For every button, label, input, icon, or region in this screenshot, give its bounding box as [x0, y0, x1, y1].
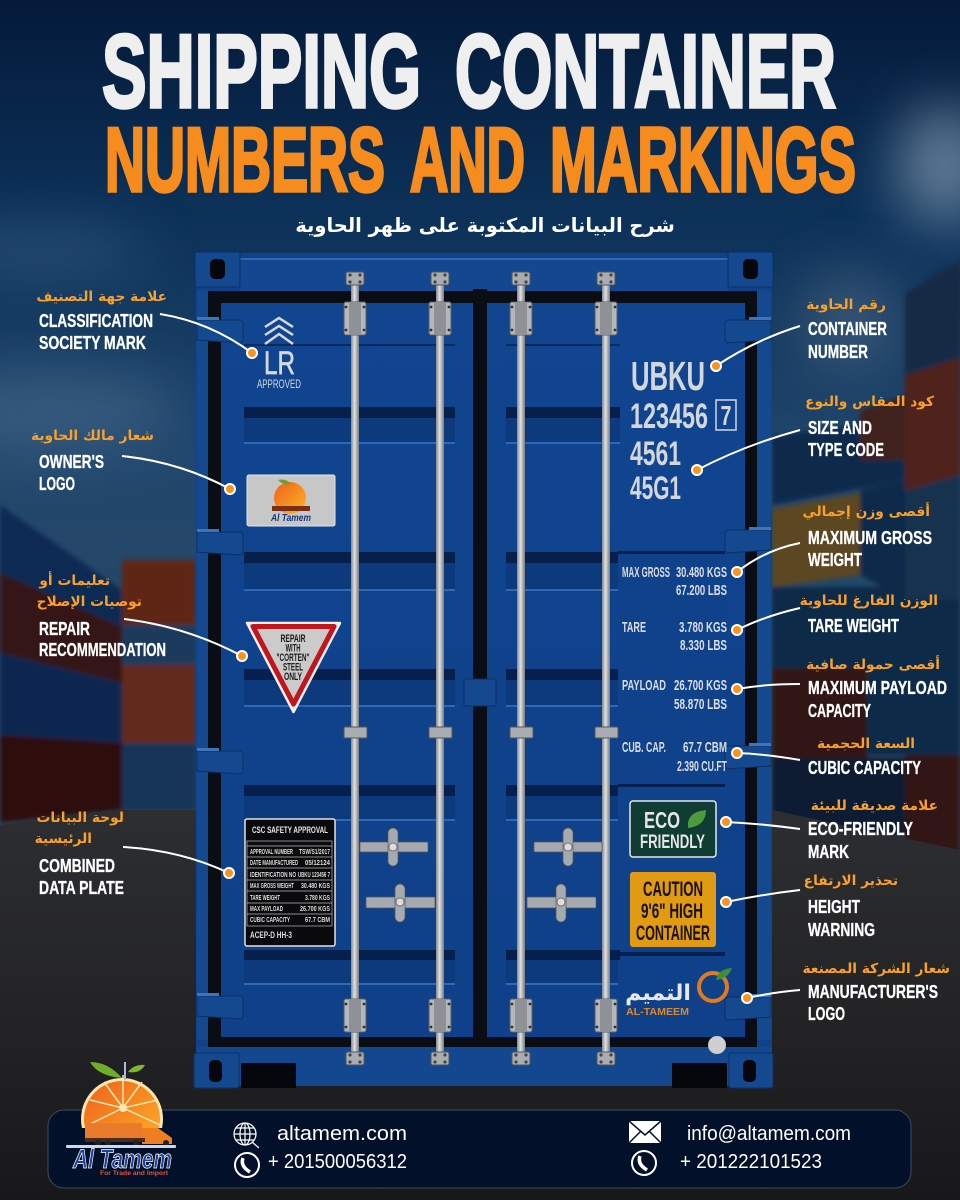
callout: repair recommendation: RECOMMENDATION — [39, 640, 166, 660]
Al Tamem company logo — [66, 1062, 176, 1177]
CSC safety approval data plate: 26.700 KGS — [300, 906, 330, 913]
top rail — [240, 258, 728, 291]
weight and capacity markings: 2.390 CU.FT — [677, 758, 727, 775]
callout: combined data plate: COMBINED — [39, 856, 115, 876]
callout: repair recommendation: توصيات الإصلاح — [37, 594, 142, 610]
callout: classification society mark: علامة جهة التصنيف — [36, 289, 167, 305]
callout: cubic capacity — [732, 736, 921, 778]
weight and capacity markings: TARE — [622, 619, 646, 636]
repair recommendation triangle: WITH — [286, 642, 301, 654]
side posts — [197, 290, 771, 1040]
callout: cubic capacity: السعة الحجمية — [817, 736, 915, 752]
callout: height warning: تحذير الارتفاع — [804, 873, 898, 889]
weight and capacity markings: 58.870 LBS — [674, 696, 727, 713]
title: SHIPPING — [102, 14, 421, 130]
phone number: + 201500056312 — [268, 1151, 407, 1173]
weight and capacity markings: 26.700 KGS — [674, 677, 727, 694]
footer contact bar — [48, 1110, 911, 1188]
weight and capacity markings — [622, 564, 727, 775]
callout: eco-friendly mark — [721, 798, 938, 862]
door gasket frame — [208, 289, 757, 1047]
callout: combined data plate: لوحة البيانات — [36, 810, 124, 826]
callout: container number: CONTAINER — [808, 319, 887, 339]
CSC safety approval data plate: TSW/S1/2017 — [299, 849, 330, 856]
right door — [487, 303, 745, 1037]
callout: tare weight — [732, 593, 938, 636]
callout: size and type code — [692, 394, 935, 475]
classification mark — [257, 318, 301, 391]
CSC safety approval data plate: 05/12124 — [305, 860, 330, 867]
grey circle marker — [708, 1036, 726, 1054]
hinges — [197, 317, 771, 1020]
CSC safety approval data plate: UBKU 123456 7 — [298, 872, 330, 879]
container number markings: 123456 — [630, 397, 708, 436]
weight and capacity markings: 3.780 KGS — [679, 619, 727, 636]
callout: cubic capacity: CUBIC CAPACITY — [808, 758, 921, 778]
callout: eco-friendly mark: ECO-FRIENDLY — [808, 819, 913, 839]
CSC safety approval data plate: DATE MANUFACTURED — [250, 860, 298, 867]
callout: repair recommendation: تعليمات أو — [38, 571, 110, 589]
manufacturer's logo: التميم — [625, 981, 691, 1006]
icon: envelope — [629, 1121, 661, 1143]
CSC safety approval data plate: ACEP-D HH-3 — [250, 930, 292, 940]
classification mark: APPROVED — [257, 377, 301, 391]
height caution sign — [630, 872, 716, 947]
weight and capacity markings: 8.330 LBS — [680, 637, 727, 654]
CSC safety approval data plate: MAX GROSS WEIGHT — [250, 883, 294, 890]
callout: owner's logo: OWNER'S — [39, 452, 104, 472]
callout: combined data plate: DATA PLATE — [39, 878, 124, 898]
CSC safety approval data plate: 67.7 CBM — [305, 917, 330, 924]
shipping container — [194, 252, 773, 1088]
owner's logo plate — [247, 475, 335, 526]
eco friendly sign: FRIENDLY — [640, 832, 705, 853]
container number markings: 45G1 — [630, 470, 681, 506]
lock rods — [344, 272, 618, 1065]
website: altamem.com — [277, 1123, 407, 1145]
icon: globe — [234, 1123, 259, 1148]
Al Tamem company logo: Al Tamem — [72, 1144, 172, 1174]
CSC safety approval data plate: 30.480 KGS — [301, 883, 330, 890]
classification mark: LR — [264, 345, 295, 381]
icon: phone — [235, 1153, 259, 1177]
manufacturer's logo — [625, 968, 732, 1018]
callout: manufacturer's logo: شعار الشركة المصنعة — [802, 961, 950, 977]
CSC safety approval data plate: MAX PAYLOAD — [250, 906, 283, 913]
callout: owner's logo: LOGO — [39, 474, 75, 494]
weight and capacity markings: MAX GROSS — [622, 564, 670, 581]
weight and capacity markings: 67.7 CBM — [683, 739, 727, 756]
height caution sign: CAUTION — [643, 878, 703, 901]
CSC safety approval data plate: APPROVAL NUMBER — [250, 849, 293, 856]
weight and capacity markings: PAYLOAD — [622, 677, 666, 694]
callout: height warning: HEIGHT — [808, 897, 860, 917]
container body — [196, 253, 772, 1086]
callout: maximum gross weight: WEIGHT — [808, 550, 862, 570]
container number markings: 4561 — [630, 435, 681, 473]
callout: size and type code: كود المقاس والنوع — [805, 394, 935, 410]
corner castings — [194, 252, 773, 1088]
title: AND — [410, 110, 525, 211]
height caution sign: CONTAINER — [636, 922, 710, 945]
callout: combined data plate — [35, 810, 234, 898]
repair recommendation triangle: ONLY — [284, 671, 302, 683]
callout: manufacturer's logo: LOGO — [808, 1004, 845, 1024]
CSC safety approval data plate: 3.780 KGS — [305, 895, 330, 902]
callout: eco-friendly mark: MARK — [808, 842, 849, 862]
callout: size and type code: TYPE CODE — [808, 440, 884, 460]
door handles — [360, 828, 602, 922]
height caution sign: 9'6" HIGH — [641, 900, 703, 923]
CSC safety approval data plate: IDENTIFICATION NO — [250, 872, 296, 879]
callout: tare weight: الوزن الفارغ للحاوية — [800, 593, 938, 609]
callout: tare weight: TARE WEIGHT — [808, 616, 899, 636]
owner's logo plate: Al Tamem — [270, 513, 311, 524]
CSC safety approval data plate: CUBIC CAPACITY — [250, 917, 290, 924]
callout: container number: NUMBER — [808, 342, 868, 362]
title: NUMBERS — [105, 110, 385, 211]
callout: height warning: WARNING — [808, 920, 875, 940]
callout: owner's logo: شعار مالك الحاوية — [31, 428, 154, 444]
callout: container number: رقم الحاوية — [806, 297, 886, 313]
container number markings — [630, 353, 736, 506]
callout: repair recommendation — [37, 571, 247, 661]
repair recommendation triangle: "CORTEN" — [276, 652, 310, 664]
title — [102, 14, 856, 211]
callout: owner's logo — [31, 428, 235, 494]
callout: maximum payload capacity: أقصى حمولة صافية — [806, 655, 940, 673]
centre latch plate — [464, 679, 496, 706]
email: info@altamem.com — [687, 1123, 851, 1145]
callout: maximum payload capacity: CAPACITY — [808, 701, 871, 721]
manufacturer's logo: AL-TAMEEM — [626, 1006, 689, 1018]
CSC safety approval data plate: CSC SAFETY APPROVAL — [252, 825, 328, 836]
callout: classification society mark: SOCIETY MARK — [39, 333, 146, 353]
container number markings: UBKU — [631, 353, 705, 399]
left door — [221, 303, 473, 1037]
callout: maximum gross weight: أقصى وزن إجمالي — [803, 502, 930, 520]
container number markings: 7 — [720, 400, 732, 431]
repair recommendation triangle — [247, 623, 340, 712]
callout: repair recommendation: REPAIR — [39, 619, 90, 639]
callout: combined data plate: الرئيسية — [35, 831, 92, 847]
CSC safety approval data plate — [245, 819, 335, 946]
callout: height warning — [721, 873, 898, 940]
callout: size and type code: SIZE AND — [808, 418, 872, 438]
callout: classification society mark: CLASSIFICATION — [39, 311, 153, 331]
weight and capacity markings: 67.200 LBS — [676, 582, 727, 599]
repair recommendation triangle: REPAIR — [280, 633, 306, 645]
icon: phone — [632, 1151, 656, 1175]
callout: eco-friendly mark: علامة صديقة للبيئة — [811, 798, 938, 814]
weight and capacity markings: 30.480 KGS — [676, 564, 727, 581]
callout: manufacturer's logo — [742, 961, 950, 1024]
weight and capacity markings: CUB. CAP. — [622, 739, 666, 756]
callout: container number — [711, 297, 887, 371]
CSC safety approval data plate: TARE WEIGHT — [250, 895, 280, 902]
Al Tamem company logo: For Trade and Import — [100, 1171, 168, 1177]
eco friendly sign — [630, 801, 716, 857]
phone number: + 201222101523 — [680, 1151, 822, 1173]
bottom rail — [196, 1047, 772, 1088]
subtitle: شرح البيانات المكتوبة على ظهر الحاوية — [295, 214, 675, 237]
callout: maximum gross weight — [732, 502, 932, 577]
eco friendly sign: ECO — [644, 807, 680, 833]
repair recommendation triangle: STEEL — [283, 662, 303, 674]
callout: classification society mark — [36, 289, 257, 358]
callout: maximum payload capacity — [732, 655, 947, 721]
